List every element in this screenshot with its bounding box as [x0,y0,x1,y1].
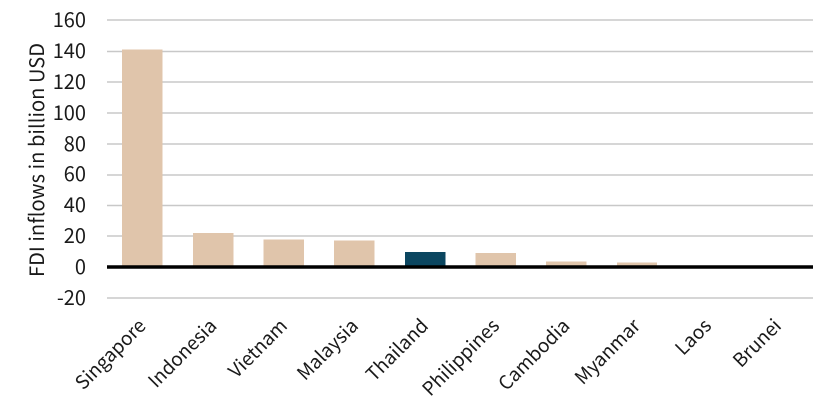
y-axis tick labels: 20 [64,220,86,249]
x-axis country labels: Philippines [416,312,505,401]
bar: Philippines [476,253,516,266]
y-axis tick labels: 140 [53,35,86,64]
x-axis country labels: Thailand [359,312,434,387]
x-axis country labels: Brunei [726,312,787,373]
bar: Myanmar [617,262,657,266]
y-axis tick labels: 40 [64,189,86,218]
x-axis country labels: Singapore [68,312,151,395]
x-axis country labels: Vietnam [222,312,293,383]
bar: Cambodia [546,262,586,266]
y-axis tick labels [53,4,86,311]
y-axis tick labels: 120 [53,66,86,95]
x-axis country labels: Indonesia [141,312,222,393]
y-axis tick labels: 160 [53,4,86,33]
bar: Singapore [122,50,162,266]
y-axis tick labels: 80 [64,128,86,157]
bar: Thailand [405,252,446,267]
x-axis country labels: Cambodia [492,312,575,396]
y-axis tick labels: -20 [57,282,86,311]
bar: Vietnam [264,240,304,266]
x-axis country labels: Laos [668,312,717,361]
bar: Malaysia [334,240,374,266]
y-axis tick labels: 60 [64,158,86,187]
y-axis title: FDI inflows in billion USD [21,43,50,277]
y-axis tick labels: 0 [75,251,86,280]
zero baseline [107,265,813,269]
x-axis country labels [68,312,787,401]
x-axis country labels: Malaysia [290,312,364,386]
x-axis country labels: Myanmar [568,312,646,390]
bar: Indonesia [193,233,234,266]
bars [122,50,657,267]
y-axis tick labels: 100 [53,97,86,126]
